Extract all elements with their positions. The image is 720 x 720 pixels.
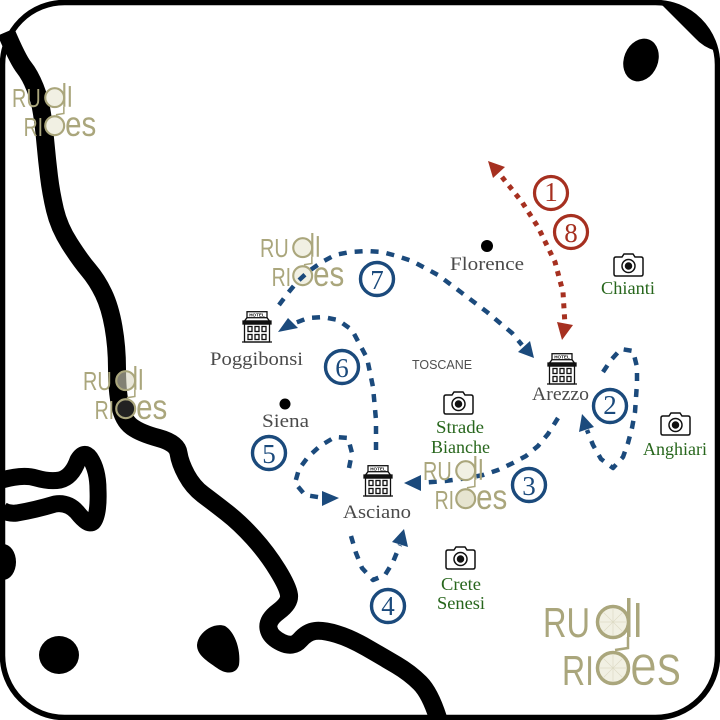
- icon: hotel Poggibonsi: HOTEL: [249, 312, 265, 317]
- label: Florence: Florence: [450, 254, 524, 275]
- icon: camera Crete Senesi: [446, 547, 475, 569]
- logo: centre top: RI: [272, 264, 291, 292]
- map: bottom left island: [39, 636, 79, 674]
- route 6: Asciano to Poggibonsi: [278, 317, 376, 450]
- marker: Florence: [481, 240, 493, 252]
- route 7: Poggibonsi to Arezzo: [279, 251, 534, 358]
- label: Crete Senesi: [437, 574, 485, 613]
- logo: centre top: [260, 233, 344, 294]
- icon: camera Anghiari: [661, 413, 690, 435]
- route 2: Anghiari loop: [579, 349, 637, 468]
- route 4: loop to Asciano: [351, 529, 408, 580]
- logo: on coast: RI: [95, 397, 114, 425]
- map: bottom island: [197, 625, 239, 673]
- label: Asciano: Asciano: [343, 502, 411, 523]
- label: Crete Senesi: Crete: [441, 574, 481, 594]
- map: top right island: [617, 33, 665, 87]
- label: Toscane: TOSCANE: [412, 357, 472, 372]
- label: Arezzo: Arezzo: [532, 384, 589, 405]
- step 5: [252, 436, 286, 470]
- step 6: 6: [335, 353, 349, 383]
- step 5: 5: [262, 439, 276, 469]
- label: Anghiari: Anghiari: [643, 439, 707, 459]
- label: Chianti: Chianti: [601, 278, 655, 298]
- step 7: [360, 262, 394, 296]
- logo: bottom right large: RI: [562, 647, 594, 694]
- step 2: [594, 390, 626, 422]
- label: Strade Bianche: Strade: [436, 417, 484, 437]
- logo: centre top: es: [313, 255, 344, 294]
- route 3: Arezzo to Asciano: [404, 418, 558, 491]
- step 4: [372, 590, 404, 622]
- map: top right corner fill: [660, 3, 716, 51]
- logo: on coast: es: [136, 388, 167, 427]
- logo: bottom right large: [543, 598, 681, 698]
- logo: top left: es: [65, 105, 96, 144]
- step 1: [534, 176, 568, 210]
- step 7: 7: [370, 265, 384, 295]
- label: Crete Senesi: Senesi: [437, 593, 485, 613]
- logo: top left: [12, 83, 96, 144]
- logo: on coast: [83, 366, 167, 427]
- step 4: 4: [381, 591, 395, 621]
- logo: top left: RI: [24, 114, 43, 142]
- icon: hotel Asciano: HOTEL: [370, 466, 386, 471]
- icon: camera Strade Bianche: [444, 392, 473, 414]
- logo: over route 3: RI: [435, 487, 454, 515]
- map: left edge island: [0, 544, 16, 580]
- logo: over route 3: es: [476, 478, 507, 517]
- logo: top left: RU: [12, 85, 41, 113]
- map: left lagoon loop: [2, 454, 98, 523]
- route 1 and 8: red dotted line: [488, 161, 573, 340]
- step 6: [326, 350, 358, 384]
- step 8: 8: [564, 218, 578, 248]
- logo: over route 3: RU: [423, 458, 452, 486]
- step 2: 2: [603, 390, 617, 420]
- icon: hotel Arezzo: [547, 354, 577, 384]
- logo: on coast: RU: [83, 368, 112, 396]
- route 5: loop to Asciano: [295, 437, 352, 506]
- icon: hotel Poggibonsi: [242, 312, 272, 342]
- icon: hotel Asciano: [363, 466, 393, 496]
- label: Strade Bianche: Bianche: [431, 437, 490, 457]
- logo: bottom right large: es: [630, 634, 681, 698]
- icon: camera Chianti: [614, 254, 643, 276]
- step 1: 1: [544, 177, 558, 207]
- step 8: [554, 216, 588, 248]
- label: Poggibonsi: Poggibonsi: [210, 349, 303, 370]
- label: Strade Bianche: [431, 417, 490, 457]
- step 3: 3: [522, 471, 536, 501]
- marker: Siena: [280, 398, 290, 410]
- label: Siena: Siena: [262, 411, 310, 432]
- logo: bottom right large: RU: [543, 599, 590, 646]
- logo: over route 3: [423, 456, 507, 517]
- map: coastline: [2, 32, 438, 718]
- step 3: [512, 468, 546, 502]
- logo: centre top: RU: [260, 235, 289, 263]
- icon: hotel Arezzo: HOTEL: [554, 354, 570, 359]
